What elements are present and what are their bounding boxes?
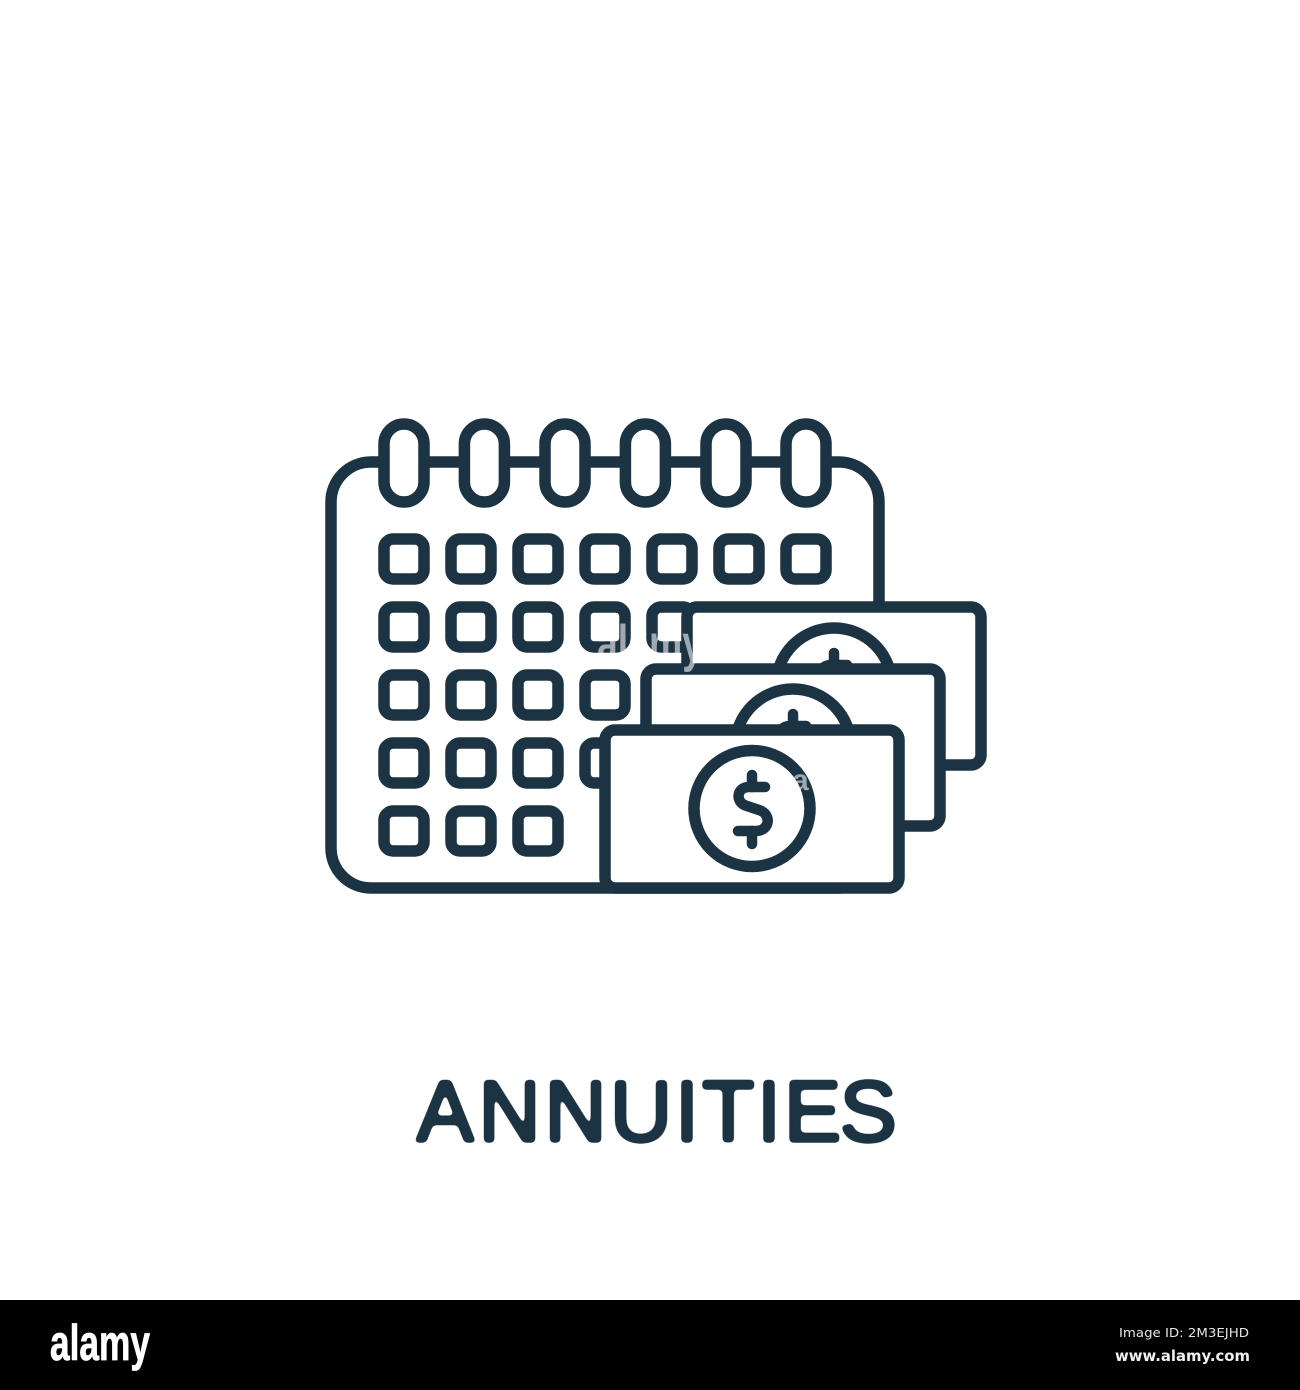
icon: front money bill with dollar coin (605, 730, 899, 888)
footer website: www.alamy.com (1115, 1347, 1250, 1365)
icon: middle money bill (646, 669, 940, 826)
footer bar (0, 1300, 1300, 1390)
footer image id: Image ID: 2M3EJHD (1119, 1325, 1249, 1340)
icon: calendar spiral rings (384, 424, 826, 502)
footer logo: alamy (50, 1315, 150, 1371)
watermark: faint alamy overlay: a (792, 764, 809, 797)
title: ANNUITIES (416, 1064, 897, 1160)
watermark: faint alamy overlay (597, 615, 809, 797)
icon: calendar with stacked money bills (331, 424, 981, 888)
icon: back money bill (687, 607, 981, 765)
watermark: faint alamy overlay: alamy (597, 615, 703, 673)
icon: calendar day grid (384, 539, 826, 851)
icon: calendar body (331, 462, 879, 888)
